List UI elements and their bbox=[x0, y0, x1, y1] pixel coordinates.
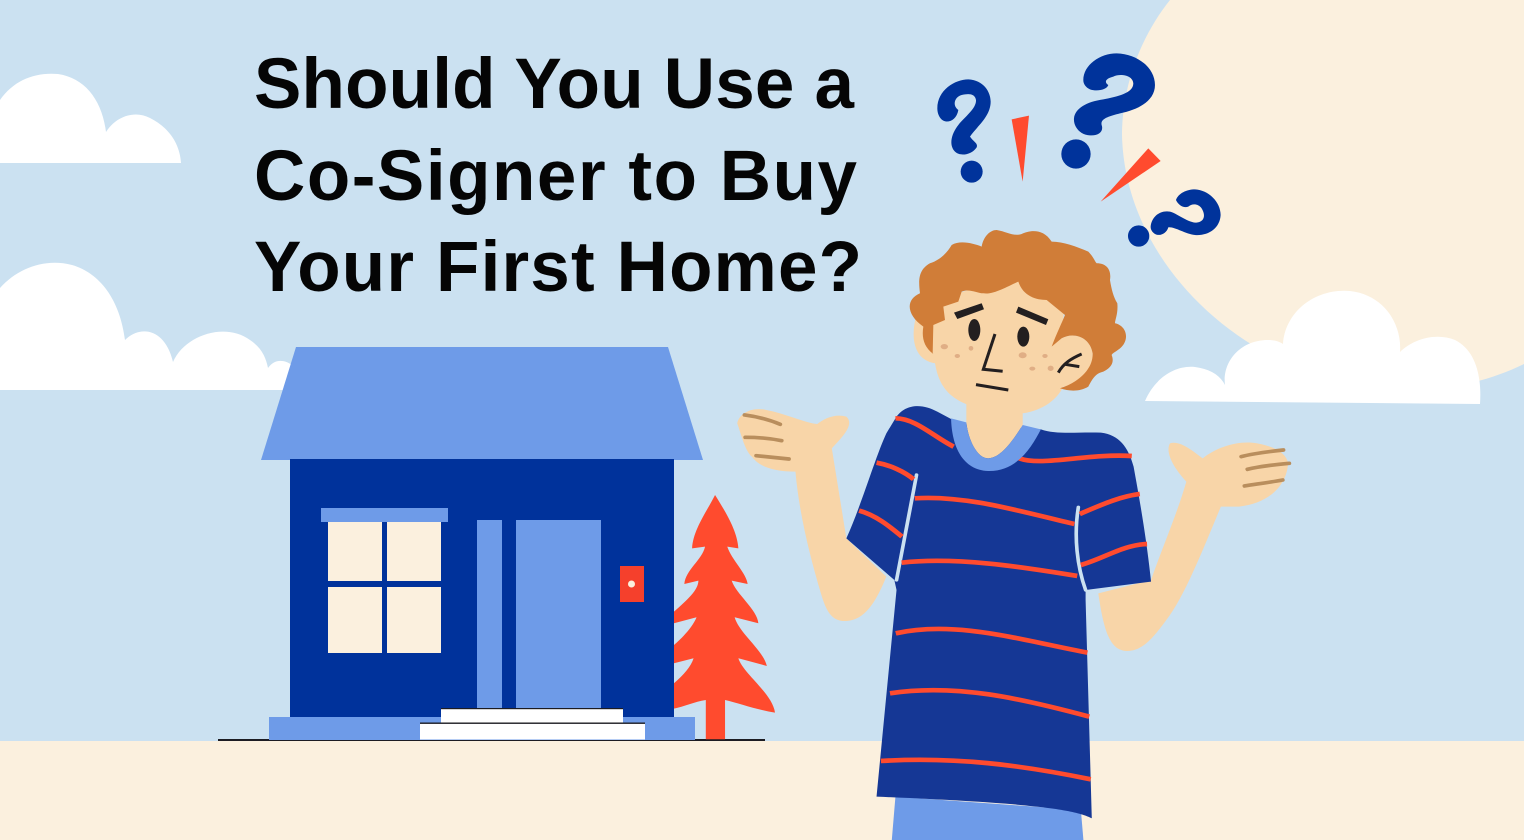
nose and mouth bbox=[976, 334, 1082, 390]
ground line bbox=[218, 739, 765, 741]
cloud: top left bbox=[0, 74, 181, 163]
striped shirt bbox=[846, 406, 1151, 818]
eyes bbox=[968, 319, 1029, 347]
eyebrows bbox=[954, 303, 1048, 325]
right arm and hand bbox=[1098, 442, 1288, 651]
finger lines bbox=[745, 415, 1289, 486]
ground bbox=[0, 741, 1524, 840]
title line 2: Co-Signer to Buy bbox=[254, 137, 858, 216]
icon: small question mark bbox=[937, 79, 991, 183]
icon: tilted question mark bbox=[1128, 189, 1221, 247]
house bbox=[261, 347, 703, 740]
house base bbox=[269, 717, 695, 740]
left arm and hand bbox=[737, 409, 886, 621]
icon: red spark bbox=[1012, 116, 1029, 182]
title line 3: Your First Home? bbox=[254, 228, 862, 307]
icon: red spark right bbox=[1101, 148, 1161, 202]
collar bbox=[951, 418, 1041, 471]
icon: red pine tree bbox=[654, 495, 775, 739]
cloud: right bbox=[1145, 291, 1480, 404]
title bbox=[254, 45, 862, 307]
face bbox=[914, 277, 1093, 413]
sleeve gaps bbox=[897, 475, 1086, 590]
sun bbox=[1122, 0, 1524, 389]
window panes bbox=[328, 522, 441, 653]
icons: question marks and sparks bbox=[937, 53, 1221, 247]
trousers bbox=[892, 797, 1083, 840]
lower step bbox=[420, 723, 645, 740]
title line 1: Should You Use a bbox=[254, 45, 854, 124]
freckles bbox=[941, 344, 1054, 371]
person bbox=[737, 53, 1289, 840]
head bbox=[910, 230, 1126, 413]
house roof bbox=[261, 347, 703, 460]
person body bbox=[737, 390, 1289, 840]
hair bbox=[910, 230, 1126, 391]
icon: large question mark bbox=[1061, 53, 1155, 169]
house wall bbox=[290, 459, 674, 718]
door bbox=[516, 520, 601, 708]
doorbell plate bbox=[620, 566, 644, 602]
neck bbox=[966, 390, 1023, 458]
window awning bbox=[321, 508, 448, 522]
door side panel bbox=[477, 520, 502, 708]
cloud: middle left bbox=[0, 263, 292, 390]
shirt stripes bbox=[859, 418, 1147, 779]
upper step bbox=[441, 708, 623, 723]
